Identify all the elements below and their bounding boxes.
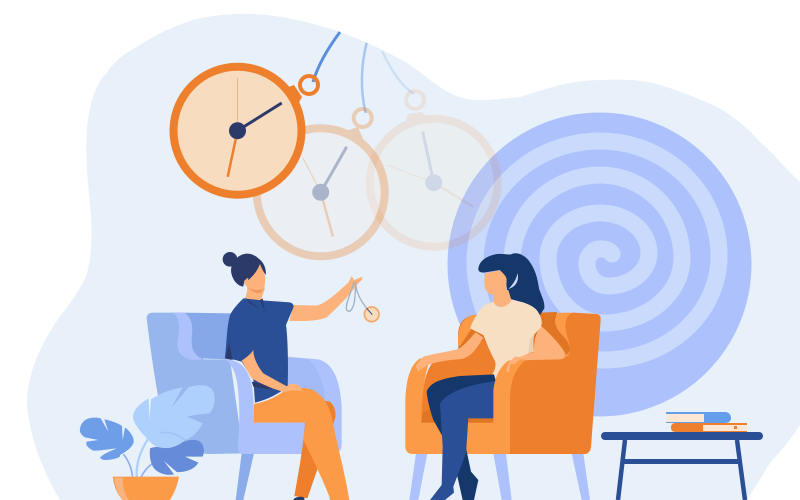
minute hand: [321, 147, 347, 192]
potted plant: [80, 385, 215, 500]
front leg: [430, 381, 496, 500]
watch face: [174, 67, 302, 195]
chair arm and seat: [225, 359, 307, 454]
shoe: [293, 497, 305, 500]
center stem: [137, 438, 148, 477]
seat shadow: [422, 407, 493, 423]
chair outer panel: [147, 313, 243, 454]
hub: [312, 184, 329, 201]
shirt shadow: [528, 336, 534, 353]
watch loop: [300, 76, 318, 94]
back leg: [294, 400, 336, 498]
thin hand: [236, 78, 238, 131]
shirt shadow: [225, 343, 278, 389]
pot highlight: [114, 478, 129, 500]
hand on knee: [283, 384, 303, 392]
watch loop: [354, 109, 372, 127]
chain of faintest watch: [382, 51, 414, 94]
watch loop: [406, 91, 424, 109]
stems: [123, 454, 155, 477]
spiral band: [475, 141, 719, 360]
pocket watch: front: [174, 32, 340, 195]
hair bun: [223, 252, 237, 267]
spiral disc: [448, 112, 752, 416]
chair back: [458, 312, 573, 373]
hypnotist woman: [223, 252, 379, 403]
watch face: [370, 119, 498, 247]
table legs: [618, 440, 745, 500]
blue armchair: [147, 313, 342, 500]
ponytail and hair: [478, 253, 544, 315]
face: [244, 263, 265, 290]
hypnotic spiral: [448, 112, 752, 416]
main chair body: [508, 313, 601, 454]
table crossbar: [624, 459, 739, 464]
neck: [245, 282, 265, 313]
hair highlight: [508, 273, 518, 289]
hanging watch chain: [346, 282, 367, 311]
watch crown: [406, 112, 426, 120]
book ribbon: [734, 426, 737, 429]
hypnotist legs and chair arm: [225, 359, 349, 500]
side table with books: [601, 412, 763, 500]
neck shadow: [248, 288, 264, 293]
seated client: [416, 253, 565, 381]
left arm and seat: [405, 358, 513, 454]
pocket watch: faintest swing position: [370, 91, 498, 247]
front arm on chair: [493, 359, 526, 423]
hanging watch: [364, 307, 379, 322]
back highlight left: [458, 315, 476, 346]
left arm: [416, 332, 483, 372]
lower book: [671, 423, 747, 432]
dark leaf: [150, 440, 204, 475]
chain of middle watch: [362, 43, 367, 113]
pot: [113, 477, 179, 500]
upper book pages: [667, 414, 704, 422]
thin hand: [387, 165, 434, 183]
minute hand: [238, 103, 282, 131]
second hand: [434, 183, 473, 207]
front thigh and leg: [254, 388, 349, 500]
chain: [313, 32, 340, 82]
second hand: [228, 131, 238, 177]
client legs and front arm: [427, 357, 526, 500]
raised arm: [289, 276, 363, 321]
chair back inner: [180, 313, 233, 359]
watch crown: [286, 85, 302, 104]
shirt collar: [244, 297, 265, 313]
chair legs: [236, 453, 337, 500]
t-shirt: [470, 300, 542, 381]
chair legs: [409, 453, 590, 500]
hub: [425, 174, 442, 191]
chair inner: [420, 340, 567, 427]
rear leg: [427, 374, 496, 500]
thin hand: [303, 158, 321, 192]
front arm highlight: [493, 359, 527, 453]
left leaf: [80, 418, 134, 460]
lower arm: [242, 350, 303, 392]
shirt: [225, 298, 294, 403]
upper book: [666, 412, 731, 423]
leaf crease: [160, 432, 185, 440]
hand: [506, 357, 522, 372]
chair right inner: [287, 357, 325, 400]
lower book pages: [703, 425, 747, 431]
second hand: [321, 192, 333, 237]
chair right back: [283, 357, 342, 454]
table top: [601, 432, 763, 440]
hair: [231, 254, 266, 287]
watch hands: [423, 132, 434, 183]
large pale leaf: [133, 385, 215, 448]
pocket watch: middle swing position: [257, 109, 385, 256]
orange armchair: [405, 312, 601, 500]
main chair body wave: [550, 313, 580, 359]
right arm: [507, 325, 565, 372]
hub: [229, 122, 246, 139]
hanging watch hand: [367, 308, 372, 315]
watch face: [257, 128, 385, 256]
watch crown: [346, 127, 364, 141]
face: [484, 270, 507, 295]
neck: [493, 290, 512, 307]
chair wave highlight: [173, 313, 203, 360]
